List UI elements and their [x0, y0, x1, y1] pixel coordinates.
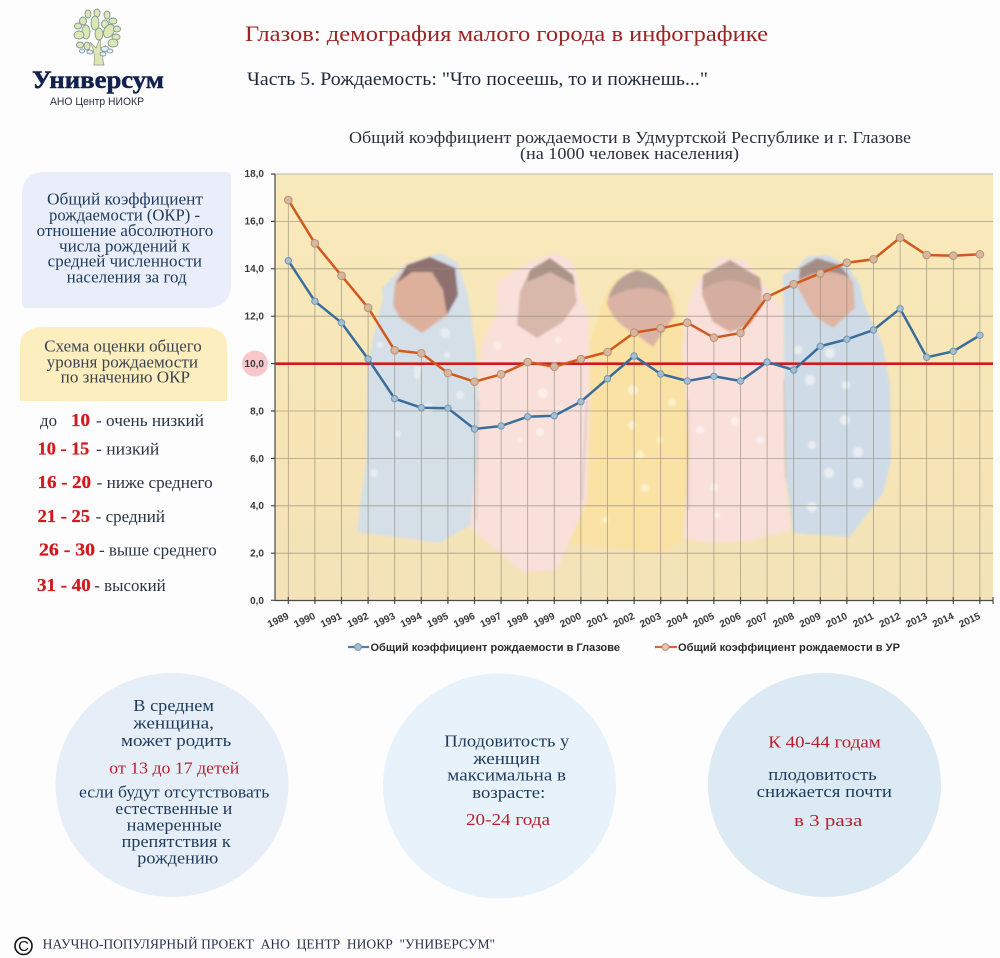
x axis labels: 2002: [612, 611, 637, 630]
x axis labels: 2000: [559, 611, 584, 630]
panel: definition of birth rate: отношение абсолютного: [37, 221, 213, 240]
circle: number of children: если будут отсутствовать: [79, 783, 270, 802]
circle: peak fertility age: Плодовитость у: [444, 732, 570, 751]
baby face 1: [393, 257, 458, 333]
x axis labels: 1998: [505, 611, 531, 630]
scale of birth rate levels: 10 - 15: [38, 438, 89, 458]
x axis labels: 2014: [931, 611, 956, 630]
x axis labels: 1992: [346, 611, 371, 630]
blue blanket 2: [783, 255, 891, 537]
panel: definition of birth rate: населения за год: [67, 267, 187, 286]
panel: definition of birth rate: рождаемости (ОКР) -: [49, 205, 200, 224]
threshold line at 10: [275, 362, 993, 365]
circle: number of children: намеренные: [127, 816, 222, 835]
x axis labels: 2005: [692, 611, 717, 630]
logo subtitle: АНО Центр НИОКР: [50, 96, 144, 108]
scale of birth rate levels: - низкий: [96, 439, 159, 458]
circle: number of children: препятствия к: [122, 832, 231, 851]
panel: assessment scheme heading: по значению ОКР: [61, 367, 190, 386]
panel: assessment scheme heading: уровня рождаемости: [47, 352, 198, 371]
y axis labels: 6,0: [250, 454, 264, 465]
x axis labels: 1996: [452, 611, 477, 630]
scale of birth rate levels: - выше среднего: [99, 541, 217, 560]
panel: assessment scheme heading: [20, 327, 227, 401]
circle: number of children: [56, 673, 288, 897]
x axis labels: 2011: [851, 611, 876, 630]
x axis labels: 2013: [904, 611, 930, 630]
x axis labels: 1990: [293, 611, 318, 630]
blue blanket 1: [357, 253, 478, 543]
x axis labels: 1995: [426, 611, 451, 630]
circle: peak fertility age: 20-24 года: [466, 810, 551, 829]
circle: number of children: может родить: [121, 731, 232, 750]
circle: peak fertility age: возрасте:: [472, 783, 545, 802]
y axis labels: [245, 169, 264, 607]
circle: fertility decline: К 40-44 годам: [768, 732, 881, 751]
x axis labels: 1993: [372, 611, 398, 630]
series: Udmurt Republic: [284, 196, 984, 386]
circle: peak fertility age: максимальна в: [447, 766, 566, 785]
grid lines: [275, 174, 993, 600]
x axis labels: 2010: [825, 611, 850, 630]
circle: fertility decline: в 3 раза: [794, 811, 863, 830]
panel: definition of birth rate: средней численности: [48, 252, 202, 271]
baby face 2: [517, 258, 577, 338]
x axis labels: 2009: [798, 611, 823, 630]
chart title: (на 1000 человек населения): [520, 144, 739, 163]
panel: assessment scheme heading: Схема оценки общего: [44, 337, 202, 356]
logo: Универсум: [32, 9, 164, 108]
x axis labels: 2015: [958, 611, 983, 630]
subtitle: Часть 5. Рождаемость: "Что посеешь, то и пожнешь...": [247, 69, 708, 90]
y axis labels: 12,0: [245, 312, 264, 322]
x axis labels: 2004: [665, 611, 690, 630]
x axis labels: 1997: [479, 611, 504, 630]
scale of birth rate levels: 21 - 25: [38, 506, 90, 526]
circle: number of children: В среднем: [133, 696, 214, 715]
y axis labels: 4,0: [250, 501, 264, 512]
icon: copyright: C: [18, 938, 29, 955]
circle: number of children: рождению: [137, 849, 219, 868]
scale of birth rate levels: - высокий: [94, 576, 166, 595]
panel: definition of birth rate: числа рождений к: [59, 236, 191, 256]
scale of birth rate levels: 31 - 40: [37, 575, 91, 595]
chart: birth rate in Udmurtia and Glazov: [242, 169, 993, 654]
scale of birth rate levels: 10: [71, 410, 90, 430]
y axis labels: 10,0: [245, 359, 264, 370]
logo wordmark: Универсум: [32, 67, 164, 94]
x axis labels: [266, 611, 983, 630]
footer credit: НАУЧНО-ПОПУЛЯРНЫЙ ПРОЕКТ АНО ЦЕНТР НИОКР "УНИВЕРСУМ": [43, 936, 495, 951]
icon: tree: [74, 9, 120, 65]
baby face 4: [702, 260, 763, 332]
scale of birth rate levels: [37, 410, 217, 595]
y axis labels: 8,0: [250, 406, 264, 418]
panel: definition of birth rate: Общий коэффициент: [47, 189, 203, 208]
circle: peak fertility age: женщин: [472, 749, 540, 768]
scale of birth rate levels: - ниже среднего: [97, 473, 213, 492]
y axis labels: 14,0: [245, 264, 264, 275]
baby face 5: [798, 258, 855, 328]
x axis labels: 2012: [878, 611, 903, 630]
x axis labels: 1999: [532, 611, 557, 630]
legend: Glazov: Общий коэффициент рождаемости в Глазове: [370, 642, 620, 654]
chart background: [275, 174, 993, 600]
baby face 3: [607, 270, 675, 347]
y axis labels: 16,0: [245, 216, 264, 228]
icon: copyright: [15, 938, 32, 955]
axes: [271, 174, 993, 604]
panel: definition of birth rate: [22, 172, 231, 308]
pink blanket 1: [470, 253, 590, 572]
blanket gaps: [476, 380, 786, 520]
x axis labels: 2006: [718, 611, 743, 630]
x axis labels: 2003: [638, 611, 664, 630]
highlight of 10,0 on y axis: [242, 350, 268, 376]
chart title: [349, 128, 911, 163]
scale of birth rate levels: 16 - 20: [38, 472, 91, 492]
y axis labels: 0,0: [250, 596, 264, 607]
scale of birth rate levels: до: [40, 411, 57, 430]
legend: Udmurt Republic: Общий коэффициент рождаемости в УР: [678, 642, 900, 654]
x axis labels: 2008: [771, 611, 797, 630]
chart title: Общий коэффициент рождаемости в Удмуртской Республике и г. Глазове: [349, 128, 911, 147]
y axis labels: 2,0: [250, 548, 264, 560]
circle: number of children: женщина,: [132, 713, 214, 732]
x axis labels: 1989: [266, 611, 291, 630]
scale of birth rate levels: 26 - 30: [39, 540, 95, 560]
title: Глазов: демография малого города в инфографике: [245, 21, 768, 46]
x axis labels: 1991: [319, 611, 344, 630]
circle: fertility decline: снижается почти: [757, 782, 892, 801]
scale of birth rate levels: - средний: [96, 507, 165, 526]
x axis labels: 1994: [399, 611, 424, 630]
circle: number of children: естественные и: [115, 799, 232, 818]
circle: number of children: от 13 до 17 детей: [109, 758, 239, 777]
series: Glazov: [285, 258, 983, 432]
circle: fertility decline: плодовитость: [768, 765, 877, 784]
circle: fertility decline: [708, 673, 941, 897]
pink blanket 2: [682, 257, 790, 543]
y axis labels: 18,0: [245, 169, 264, 180]
x axis labels: 2001: [585, 611, 610, 630]
scale of birth rate levels: - очень низкий: [96, 411, 204, 430]
circle: peak fertility age: [383, 674, 616, 898]
yellow blanket: [570, 268, 688, 553]
photo: five swaddled babies: [357, 253, 891, 572]
x axis labels: 2007: [745, 611, 770, 630]
